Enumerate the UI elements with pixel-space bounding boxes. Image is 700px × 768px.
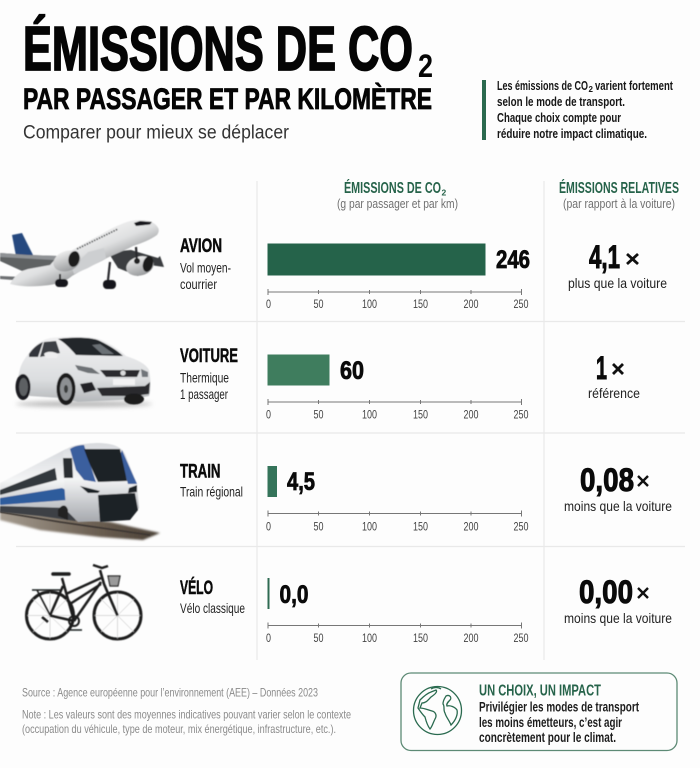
bar chart: voiture: 60 (340, 357, 364, 385)
bar chart: train (266, 466, 529, 534)
relative value: voiture (588, 350, 640, 401)
callout: concrètement pour le climat. (479, 730, 616, 745)
bar chart: avion: 250 (514, 297, 529, 311)
table grid lines (16, 181, 685, 660)
callout (401, 673, 677, 750)
column heading: relative emissions (559, 180, 679, 211)
label: avion: AVION (180, 235, 222, 257)
callout: Privilégier les modes de transport (479, 700, 639, 714)
bar chart: velo: 0,0 (280, 581, 308, 609)
bar chart: train: 50 (314, 520, 324, 534)
relative value: voiture: 1 (596, 350, 607, 386)
bar chart: voiture: 200 (464, 408, 479, 422)
bar chart: avion: 0 (266, 297, 271, 311)
bar chart: avion: 100 (362, 297, 377, 311)
bar chart: train: 100 (362, 520, 377, 534)
column heading: emissions: (g par passager et par km) (337, 197, 458, 211)
label: velo: Vélo classique (180, 600, 245, 616)
bar chart: voiture: 0 (266, 408, 271, 422)
relative value: avion (568, 239, 667, 291)
icon: globe (414, 686, 462, 734)
intro text with green bar: réduire notre impact climatique. (497, 126, 647, 141)
bar chart: train: 4,5 (287, 468, 315, 496)
main title: 2 (418, 48, 433, 84)
intro text with green bar: 2 (588, 85, 594, 94)
icon: airplane (0, 220, 164, 289)
column heading: emissions: 2 (442, 188, 446, 198)
source and note: Source : Agence européenne pour l’environnement (AEE) – Données 2023 (22, 686, 318, 700)
relative value: avion: plus que la voiture (568, 275, 667, 291)
callout: UN CHOIX, UN IMPACT (479, 682, 601, 700)
bar chart: avion: 246 (496, 246, 530, 274)
icon: bicycle (26, 565, 141, 639)
intro text with green bar: Les émissions de CO (497, 78, 588, 93)
relative value: velo (564, 574, 672, 626)
intro text with green bar: varient fortement (595, 78, 673, 93)
bar chart: avion: 150 (413, 297, 428, 311)
bar chart: voiture: 100 (362, 408, 377, 422)
bar chart: voiture: 150 (413, 408, 428, 422)
bar chart: voiture: 50 (314, 408, 324, 422)
label: train: Train régional (180, 484, 243, 500)
bar chart: velo (266, 578, 529, 645)
bar chart: train: 0 (266, 520, 271, 534)
bar chart: velo: 100 (362, 631, 377, 645)
label: avion (180, 235, 231, 292)
label: velo: VÉLO (180, 576, 213, 599)
second title line: PAR PASSAGER ET PAR KILOMÈTRE (23, 82, 432, 116)
relative value: train (564, 462, 672, 514)
source and note: (occupation du véhicule, type de moteur, mix énergétique, infrastructure, etc.). (22, 722, 336, 736)
icon: train (0, 443, 160, 540)
bar chart: velo: 250 (514, 631, 529, 645)
source and note (22, 686, 351, 736)
intro text with green bar: selon le mode de transport. (497, 94, 625, 109)
bar chart: avion: 200 (464, 297, 479, 311)
label: voiture: Thermique (180, 370, 229, 386)
bar chart: voiture: 250 (514, 408, 529, 422)
icon: car (16, 337, 152, 407)
label: velo (180, 576, 245, 616)
title block (23, 15, 433, 144)
relative value: train: 0,08 (580, 462, 634, 498)
bar chart: train: 250 (514, 520, 529, 534)
relative value: velo: 0,00 (579, 574, 633, 610)
label: voiture: 1 passager (180, 386, 228, 402)
bar chart: train: 150 (413, 520, 428, 534)
bar chart: velo: 0 (266, 631, 271, 645)
source and note: Note : Les valeurs sont des moyennes indicatives pouvant varier selon le contexte (22, 708, 351, 722)
label: avion: courrier (180, 276, 217, 292)
label: avion: Vol moyen- (180, 260, 231, 276)
bar chart: velo: 200 (464, 631, 479, 645)
bar chart: velo: 150 (413, 631, 428, 645)
bar chart: velo: 50 (314, 631, 324, 645)
relative value: avion: 4,1 (589, 239, 620, 275)
main title: ÉMISSIONS DE CO (23, 15, 413, 84)
bar chart: avion: 50 (314, 297, 324, 311)
intro text with green bar: Chaque choix compte pour (497, 110, 621, 125)
column heading: relative emissions: (par rapport à la voiture) (563, 197, 675, 211)
label: train (180, 460, 243, 500)
relative value: velo: moins que la voiture (564, 610, 672, 626)
callout: les moins émetteurs, c’est agir (479, 715, 623, 730)
label: train: TRAIN (180, 460, 220, 482)
label: voiture: VOITURE (180, 345, 238, 367)
column heading: emissions (337, 180, 458, 211)
relative value: voiture: référence (588, 385, 640, 401)
subtitle: Comparer pour mieux se déplacer (23, 122, 290, 144)
column heading: emissions: ÉMISSIONS DE CO (344, 180, 441, 197)
bar chart: avion (266, 244, 530, 311)
relative value: train: moins que la voiture (564, 498, 672, 514)
bar chart: train: 200 (464, 520, 479, 534)
intro text with green bar (482, 78, 673, 141)
label: voiture (180, 345, 238, 402)
bar chart: voiture (266, 354, 529, 422)
